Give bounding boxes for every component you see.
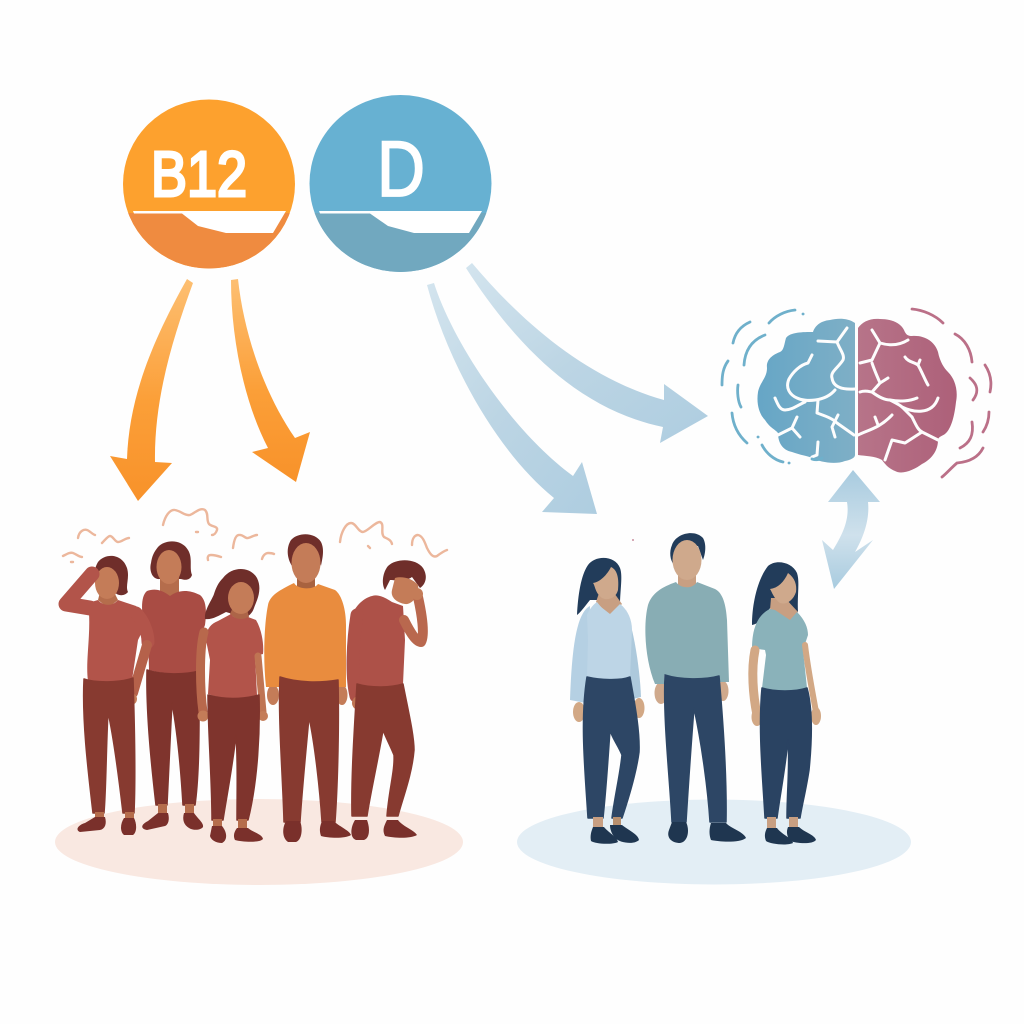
infographic canvas: [55, 95, 992, 885]
arrow: B12 to affected group right: [231, 279, 310, 482]
affected group: five people: [66, 534, 426, 843]
person 3: woman front: [198, 569, 268, 843]
vitamin D circle: [310, 95, 492, 272]
left hemisphere: [757, 319, 855, 463]
person 1: woman light blue shirt: [570, 558, 644, 844]
arrow: brain and healthy group two-way: [822, 470, 880, 589]
left hemisphere folds: [775, 328, 855, 457]
right hemisphere: [858, 319, 957, 472]
stress squiggles: [63, 509, 447, 562]
small decorative dot: [632, 539, 634, 541]
B12 vitamin circle: B12: [151, 138, 247, 210]
person 5: head in hand: [350, 560, 426, 840]
arrow: vitamin D to brain: [466, 263, 708, 443]
brain illustration: [722, 309, 991, 477]
person 1: hand on head: [66, 556, 148, 835]
arrow: B12 to affected group left: [110, 279, 193, 501]
person 3: woman teal t-shirt: [752, 562, 821, 844]
healthy group: three people: [570, 533, 821, 844]
vitamin D circle: D: [377, 124, 425, 213]
right signal dashes: [912, 309, 991, 477]
right hemisphere folds: [858, 330, 938, 460]
ground ellipse: healthy group: [517, 800, 911, 884]
person 4: orange shirt: [264, 534, 351, 842]
person 2: woman behind: [142, 541, 206, 830]
B12 vitamin circle: [123, 100, 295, 268]
left signal dashes: [722, 310, 822, 463]
person 2: man teal shirt: [645, 533, 746, 843]
ground ellipse: affected group: [55, 799, 463, 885]
arrow: vitamin D to healthy group: [427, 283, 597, 514]
